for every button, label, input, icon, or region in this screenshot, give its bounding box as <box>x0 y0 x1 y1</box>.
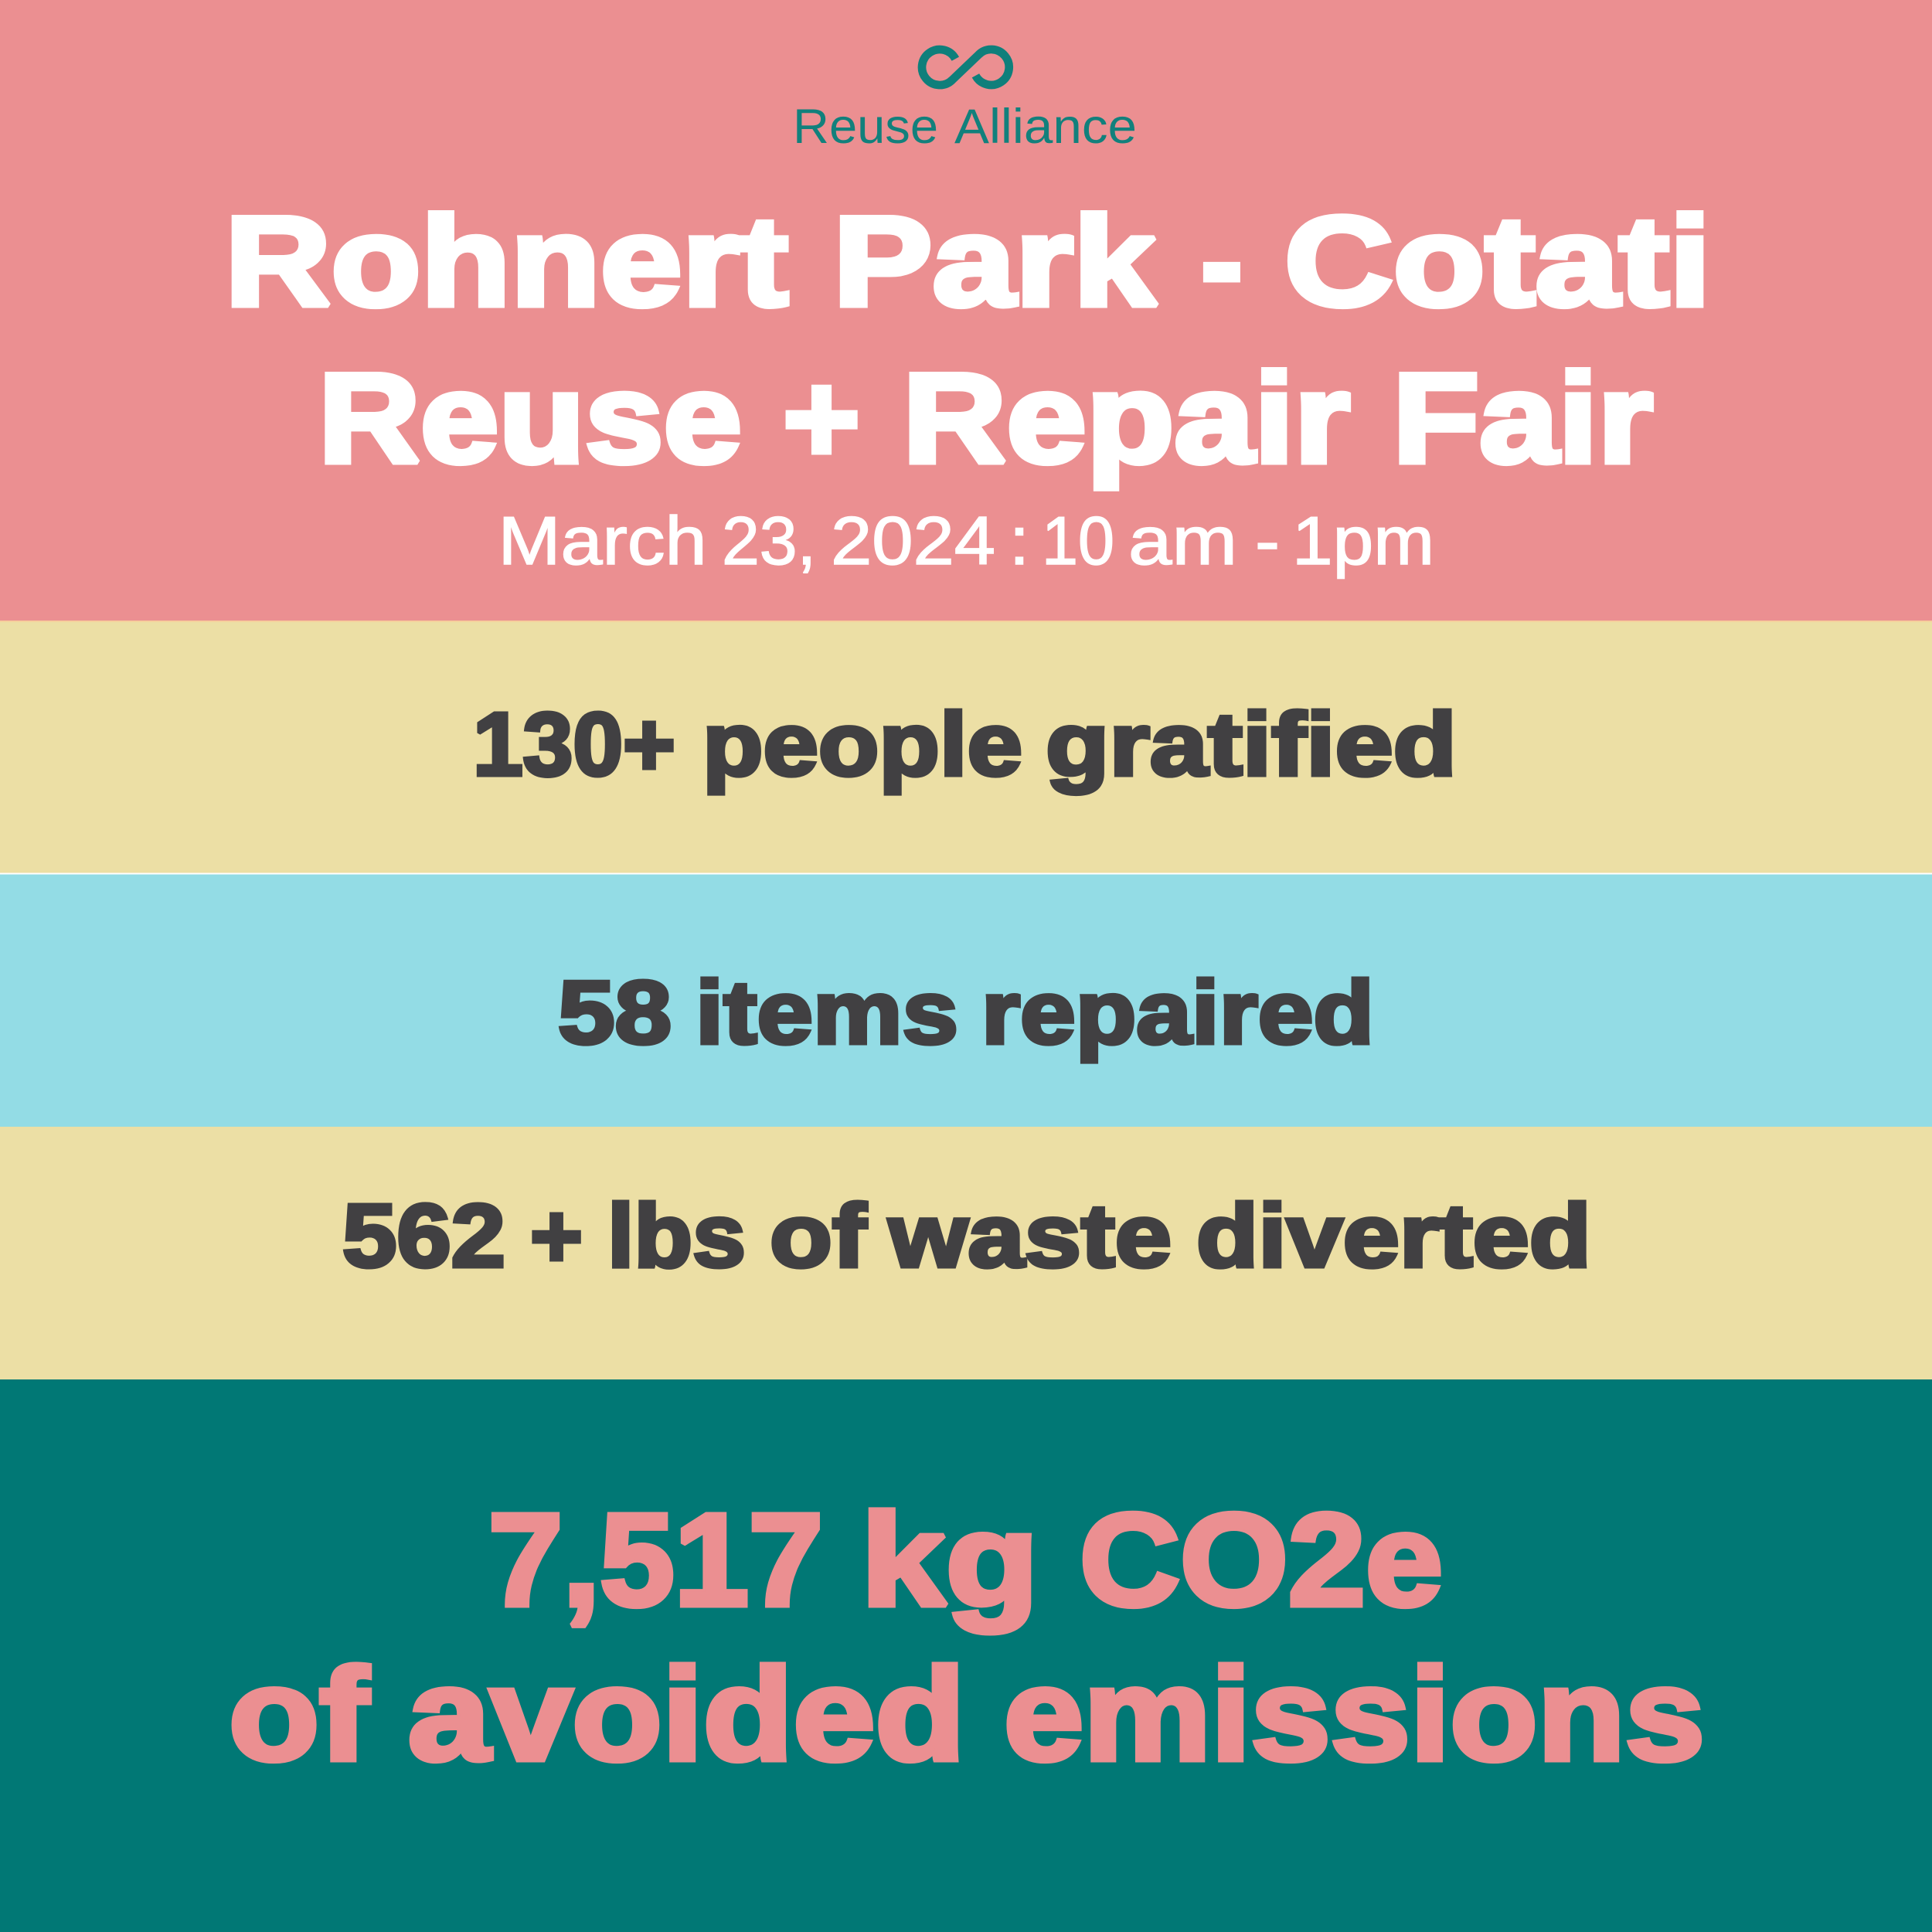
title: + <box>783 347 860 489</box>
headline: avoided emissions: of <box>229 1641 369 1788</box>
title: Rohnert <box>225 190 788 332</box>
event date and time: am <box>1128 502 1237 579</box>
event date and time <box>498 502 1434 579</box>
stat: waste diverted: + <box>530 1185 583 1286</box>
title: Reuse <box>318 347 742 489</box>
stat: people gratified: 130+ <box>473 694 675 794</box>
stat: waste diverted: waste <box>888 1185 1172 1286</box>
title: Park <box>833 190 1156 332</box>
title <box>225 190 1711 489</box>
headline: avoided emissions: avoided <box>408 1641 965 1788</box>
panel: people gratified <box>0 622 1932 873</box>
stat: items repaired: items <box>696 962 958 1063</box>
stat: people gratified: people <box>702 694 1022 794</box>
title: Fair <box>1393 347 1653 489</box>
logo wordmark: Reuse <box>793 100 938 154</box>
stat: waste diverted: lbs <box>607 1185 746 1286</box>
event date and time: 1pm <box>1292 502 1434 579</box>
stat: items repaired: 58 <box>558 962 672 1063</box>
event date and time: 10 <box>1042 502 1114 579</box>
stat: waste diverted: of <box>770 1185 866 1286</box>
stat: people gratified <box>473 694 1457 794</box>
headline: avoided emissions: kg <box>861 1487 1039 1634</box>
event date and time: : <box>1009 502 1029 579</box>
logo: Reuse Alliance <box>793 49 1137 154</box>
stat: waste diverted <box>342 1185 1591 1286</box>
event date and time: 2024 <box>831 502 995 579</box>
event date and time: 23, <box>722 502 816 579</box>
event date and time: March <box>498 502 706 579</box>
panel: avoided emissions <box>0 1379 1932 1932</box>
title: - <box>1201 190 1243 332</box>
icon: infinity loop <box>922 49 1009 85</box>
panel: items repaired <box>0 875 1932 1127</box>
logo wordmark <box>793 100 1137 154</box>
headline: avoided emissions: CO2e <box>1080 1487 1443 1634</box>
stat: items repaired: repaired <box>981 962 1374 1063</box>
event date and time: - <box>1255 502 1280 579</box>
panel: header <box>0 0 1932 622</box>
headline: avoided emissions: emissions <box>1004 1641 1705 1788</box>
stat: waste diverted: diverted <box>1196 1185 1591 1286</box>
stat: items repaired <box>558 962 1374 1063</box>
title: Repair <box>903 347 1350 489</box>
title: Cotati <box>1284 190 1711 332</box>
stat: waste diverted: 562 <box>342 1185 505 1286</box>
headline: avoided emissions: 7,517 <box>488 1487 823 1634</box>
stat: people gratified: gratified <box>1046 694 1457 794</box>
panel: waste diverted <box>0 1127 1932 1379</box>
headline: avoided emissions <box>229 1487 1705 1788</box>
logo wordmark: Alliance <box>954 100 1137 154</box>
